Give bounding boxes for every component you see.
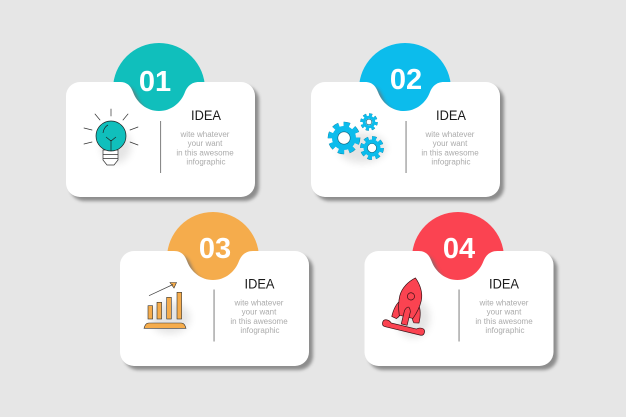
icon: gears bbox=[330, 115, 386, 163]
divider bbox=[406, 121, 407, 173]
number badge 03 bbox=[167, 212, 259, 304]
number 02: 02 bbox=[390, 64, 422, 96]
text block: in this awesome bbox=[230, 317, 288, 326]
text block: infographic bbox=[485, 326, 525, 335]
panel: idea 03 bbox=[120, 212, 313, 370]
text block: your want bbox=[188, 139, 223, 148]
text block: infographic bbox=[186, 158, 226, 166]
number 04: 04 bbox=[443, 233, 475, 265]
text block: wite whatever bbox=[234, 298, 284, 308]
text block: infographic bbox=[240, 326, 280, 335]
number 03: 03 bbox=[199, 233, 231, 265]
panel: idea 04 bbox=[364, 212, 558, 370]
text block: infographic bbox=[431, 158, 471, 166]
heading: IDEA bbox=[244, 276, 275, 292]
small gear bbox=[362, 115, 376, 129]
card 04 bbox=[364, 251, 558, 370]
heading: IDEA bbox=[436, 107, 467, 123]
divider bbox=[458, 290, 460, 342]
big gear bbox=[330, 124, 358, 152]
heading: IDEA bbox=[191, 107, 222, 123]
text block: your want bbox=[242, 308, 277, 316]
card 03 bbox=[120, 251, 313, 370]
number badge 02 bbox=[359, 43, 451, 135]
heading: IDEA bbox=[489, 276, 520, 292]
text block: wite whatever bbox=[425, 130, 475, 139]
text block: your want bbox=[487, 308, 522, 316]
icon: rocket bbox=[382, 273, 436, 338]
text block: in this awesome bbox=[475, 317, 533, 326]
number badge 04 bbox=[412, 212, 504, 304]
panel: idea 01 bbox=[66, 43, 259, 201]
text block: your want bbox=[433, 139, 468, 148]
number badge 01 bbox=[113, 43, 205, 135]
divider bbox=[160, 121, 161, 173]
divider bbox=[214, 290, 215, 342]
card 02 bbox=[311, 82, 504, 201]
panel: idea 02 bbox=[311, 43, 504, 201]
icon: light bulb bbox=[84, 109, 138, 165]
text block: in this awesome bbox=[176, 148, 234, 158]
medium gear bbox=[362, 138, 382, 158]
text block: wite whatever bbox=[479, 298, 529, 308]
text block: in this awesome bbox=[421, 148, 479, 158]
card 01 bbox=[66, 82, 259, 201]
icon: growth chart bbox=[144, 282, 190, 334]
number 01: 01 bbox=[139, 66, 171, 98]
text block: wite whatever bbox=[180, 130, 230, 139]
